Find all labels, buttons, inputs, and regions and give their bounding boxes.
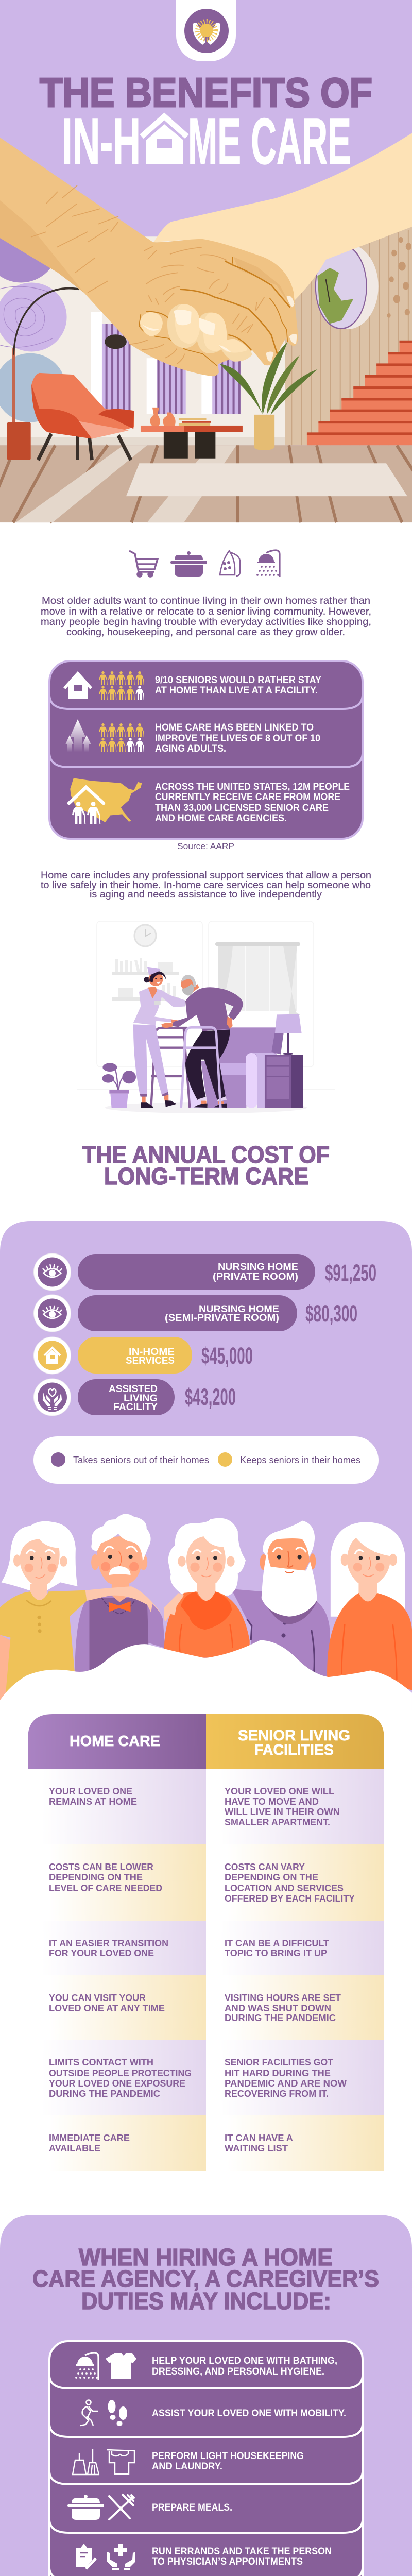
row 5: HIT HARD DURING THE <box>225 2068 331 2078</box>
duty: housekeeping and laundry: AND LAUNDRY. <box>152 2461 222 2472</box>
header: senior living facilities: SENIOR LIVING <box>238 1727 350 1744</box>
senior: woman with orange scarf <box>164 1518 250 1658</box>
row 2: DEPENDING ON THE <box>225 1872 318 1883</box>
heading: caregiver duties: DUTIES MAY INCLUDE: <box>81 2287 331 2314</box>
row: nursing home private room <box>34 1253 376 1291</box>
illustration: nurse helping an older man with a walker <box>77 921 335 1113</box>
walker, sofa, cabinet, figures <box>102 967 303 1108</box>
intro paragraph: Most older adults want to continue living in their own homes rather than <box>42 595 370 606</box>
duty: errands and appointments <box>76 2544 332 2570</box>
row: assisted living facility: ASSISTED <box>109 1384 158 1395</box>
header: home care <box>28 1714 206 1769</box>
walker front frame <box>181 1027 220 1108</box>
row 1: SMALLER APARTMENT. <box>225 1817 330 1827</box>
row 5: RECOVERING FROM IT. <box>225 2089 329 2099</box>
icon: shopping cart <box>129 551 158 577</box>
row: assisted living facility: LIVING <box>124 1393 158 1404</box>
row 1: WILL LIVE IN THEIR OWN <box>225 1807 340 1817</box>
row 2: LEVEL OF CARE NEEDED <box>49 1883 162 1893</box>
comparison table <box>28 1714 384 2171</box>
nurse <box>133 967 185 1108</box>
row 2: OFFERED BY EACH FACILITY <box>225 1893 355 1904</box>
icon: house <box>64 673 91 699</box>
title: IN-H <box>62 105 141 178</box>
row: nursing home private room: (PRIVATE ROOM) <box>213 1272 298 1282</box>
older hand holding younger hand <box>129 228 298 376</box>
sofa <box>189 1027 277 1108</box>
row: in-home services: $45,000 <box>201 1343 253 1369</box>
legend: Keeps seniors in their homes <box>240 1455 360 1465</box>
row 4: DURING THE PANDEMIC <box>225 2013 336 2023</box>
stat text: AND HOME CARE AGENCIES. <box>155 813 287 824</box>
row 2: LOCATION AND SERVICES <box>225 1883 344 1893</box>
living room scene <box>0 210 412 522</box>
row: nursing home private room: NURSING HOME <box>218 1262 298 1273</box>
younger hand and arm <box>153 133 412 301</box>
row 3: IT AN EASIER TRANSITION <box>49 1938 168 1948</box>
row 5 <box>28 2040 384 2115</box>
senior: man with bow tie <box>75 1514 165 1674</box>
row 2: DEPENDING ON THE <box>49 1872 143 1883</box>
row: nursing home semi-private room <box>34 1295 357 1332</box>
stat text: HOME CARE HAS BEEN LINKED TO <box>155 722 314 733</box>
row: nursing home semi-private room: (SEMI-PRIVATE ROOM) <box>165 1313 279 1324</box>
stat: 9 of 10 seniors <box>64 671 321 700</box>
row 5: OUTSIDE PEOPLE PROTECTING <box>49 2068 192 2078</box>
icon: clothes iron <box>220 551 240 576</box>
potted plant <box>220 342 317 450</box>
illustration: five seniors <box>0 1514 412 1719</box>
white wave divider <box>0 1640 412 1719</box>
row 1: YOUR LOVED ONE WILL <box>225 1786 334 1797</box>
small potted plant <box>102 1063 136 1108</box>
row 3: TOPIC TO BRING IT UP <box>225 1948 327 1958</box>
senior: woman with yellow shirt <box>0 1521 162 1700</box>
duty: meals: PREPARE MEALS. <box>152 2502 232 2513</box>
row 4: LOVED ONE AT ANY TIME <box>49 2003 165 2013</box>
stat text: IMPROVE THE LIVES OF 8 OUT OF 10 <box>155 733 320 744</box>
heading: annual cost: THE ANNUAL COST OF <box>82 1141 330 1168</box>
stat text <box>155 722 320 754</box>
duty: housekeeping and laundry: PERFORM LIGHT HOUSEKEEPING <box>152 2451 304 2462</box>
second paragraph <box>41 870 371 900</box>
heading: caregiver duties <box>32 2244 379 2314</box>
row: assisted living facility <box>34 1379 236 1416</box>
row 6 <box>28 2115 384 2171</box>
title: THE BENEFITS OF <box>40 70 372 115</box>
duty: errands and appointments: RUN ERRANDS AND TAKE THE PERSON <box>152 2546 332 2557</box>
duty: errands and appointments: TO PHYSICIAN’S APPOINTMENTS <box>152 2556 303 2567</box>
stat text: 9/10 SENIORS WOULD RATHER STAY <box>155 675 321 686</box>
row: assisted living facility: $43,200 <box>185 1384 236 1410</box>
panel: annual cost chart <box>0 1221 412 1719</box>
duty: bathing and dressing: HELP YOUR LOVED ONE WITH BATHING, <box>152 2355 337 2366</box>
row 3: FOR YOUR LOVED ONE <box>49 1948 154 1958</box>
duty: meals <box>67 2495 232 2520</box>
row 5: PANDEMIC AND ARE NOW <box>225 2078 347 2089</box>
coffee table with vases and books <box>141 408 243 459</box>
stat: 8 of 10 adults <box>65 719 320 754</box>
icon: up arrows <box>65 719 91 752</box>
second paragraph: is aging and needs assistance to live independently <box>90 889 322 900</box>
older arm <box>0 138 165 342</box>
stat text: ACROSS THE UNITED STATES, 12M PEOPLE <box>155 782 350 792</box>
row 2: COSTS CAN VARY <box>225 1862 305 1872</box>
walker back frame <box>151 1028 190 1108</box>
row 5: SENIOR FACILITIES GOT <box>225 2057 333 2067</box>
stairs <box>307 341 412 445</box>
icon: shower <box>256 550 280 577</box>
stat text <box>155 782 350 824</box>
row: assisted living facility: FACILITY <box>113 1402 158 1413</box>
round mirror <box>316 244 379 329</box>
header: home care: HOME CARE <box>70 1733 160 1750</box>
panel: caregiver duties background <box>0 2215 412 2576</box>
row 3 <box>28 1921 384 1975</box>
row 4: VISITING HOURS ARE SET <box>225 1993 341 2003</box>
cabinet <box>265 1055 303 1108</box>
older man <box>173 975 243 1108</box>
duty: mobility: ASSIST YOUR LOVED ONE WITH MOBILITY. <box>152 2408 346 2419</box>
row 2 <box>28 1844 384 1921</box>
row 5: LIMITS CONTACT WITH <box>49 2057 153 2067</box>
windows <box>91 312 241 414</box>
stat text: THAN 33,000 LICENSED SENIOR CARE <box>155 803 329 814</box>
row 5: DURING THE PANDEMIC <box>49 2089 160 2099</box>
stat text: AT HOME THAN LIVE AT A FACILITY. <box>155 685 318 696</box>
duty: mobility <box>80 2400 346 2426</box>
duty: bathing and dressing: DRESSING, AND PERSONAL HYGIENE. <box>152 2366 324 2377</box>
source line: Source: AARP <box>177 841 234 851</box>
heading: annual cost <box>82 1141 330 1190</box>
header: senior living facilities <box>206 1714 384 1769</box>
row 1 <box>28 1769 384 1844</box>
row 6: WAITING LIST <box>225 2143 288 2154</box>
intro paragraph: move in with a relative or relocate to a senior living community. However, <box>41 606 371 617</box>
row 1: HAVE TO MOVE AND <box>225 1797 319 1807</box>
lamp <box>271 1014 302 1055</box>
row: nursing home semi-private room: NURSING HOME <box>199 1304 279 1315</box>
legend: Takes seniors out of their homes <box>73 1455 209 1465</box>
armchair <box>31 373 134 460</box>
heading: annual cost: LONG-TERM CARE <box>104 1163 308 1190</box>
stat text: CURRENTLY RECEIVE CARE FROM MORE <box>155 792 340 803</box>
room background <box>77 921 335 1113</box>
senior: bearded man <box>231 1521 330 1682</box>
row 5: YOUR LOVED ONE EXPOSURE <box>49 2078 185 2089</box>
floor lamp <box>7 289 79 460</box>
logo tab <box>176 0 236 61</box>
row 3: IT CAN BE A DIFFICULT <box>225 1938 329 1948</box>
header: senior living facilities: FACILITIES <box>254 1742 334 1758</box>
duty: housekeeping and laundry <box>73 2449 304 2475</box>
stat text: AGING ADULTS. <box>155 743 226 754</box>
stat: 12M people <box>69 778 350 824</box>
panel: statistics <box>49 661 363 839</box>
row: in-home services: SERVICES <box>126 1355 175 1366</box>
icon: cooking pot <box>170 551 207 577</box>
row 2: COSTS CAN BE LOWER <box>49 1862 153 1872</box>
hero illustration: two hands over a living room <box>0 0 412 522</box>
heading: caregiver duties: WHEN HIRING A HOME <box>79 2244 333 2270</box>
row 1: REMAINS AT HOME <box>49 1797 137 1807</box>
icon: US map with couple under a roof <box>69 778 142 824</box>
row: nursing home semi-private room: $80,300 <box>305 1300 357 1327</box>
people pictogram 8 of 10 <box>99 723 144 752</box>
panel: duties list <box>49 2341 363 2576</box>
floor <box>0 445 412 522</box>
row: in-home services: IN-HOME <box>129 1347 175 1358</box>
row 4: AND WAS SHUT DOWN <box>225 2003 331 2013</box>
row: nursing home private room: $91,250 <box>325 1260 376 1286</box>
row 4 <box>28 1975 384 2040</box>
heading: caregiver duties: CARE AGENCY, A CAREGIVER’S <box>32 2265 379 2292</box>
duty: bathing and dressing <box>75 2353 337 2380</box>
senior: woman with long hair <box>327 1522 412 1690</box>
row 4: YOU CAN VISIT YOUR <box>49 1993 146 2003</box>
row 6: AVAILABLE <box>49 2143 100 2154</box>
legend <box>33 1436 379 1484</box>
intro paragraph <box>41 595 371 638</box>
stat text <box>155 675 321 696</box>
intro paragraph: cooking, housekeeping, and personal care as they grow older. <box>66 626 345 638</box>
intro paragraph: many people begin having trouble with everyday activities like shopping, <box>41 616 371 628</box>
row 6: IMMEDIATE CARE <box>49 2133 130 2143</box>
people pictogram 9 of 10 <box>99 671 144 700</box>
title <box>40 70 372 178</box>
row: in-home services <box>34 1337 253 1374</box>
second paragraph: to live safely in their home. In-home care services can help someone who <box>41 879 371 891</box>
row 6: IT CAN HAVE A <box>225 2133 293 2143</box>
second paragraph: Home care includes any professional support services that allow a person <box>41 870 371 881</box>
row 1: YOUR LOVED ONE <box>49 1786 132 1797</box>
